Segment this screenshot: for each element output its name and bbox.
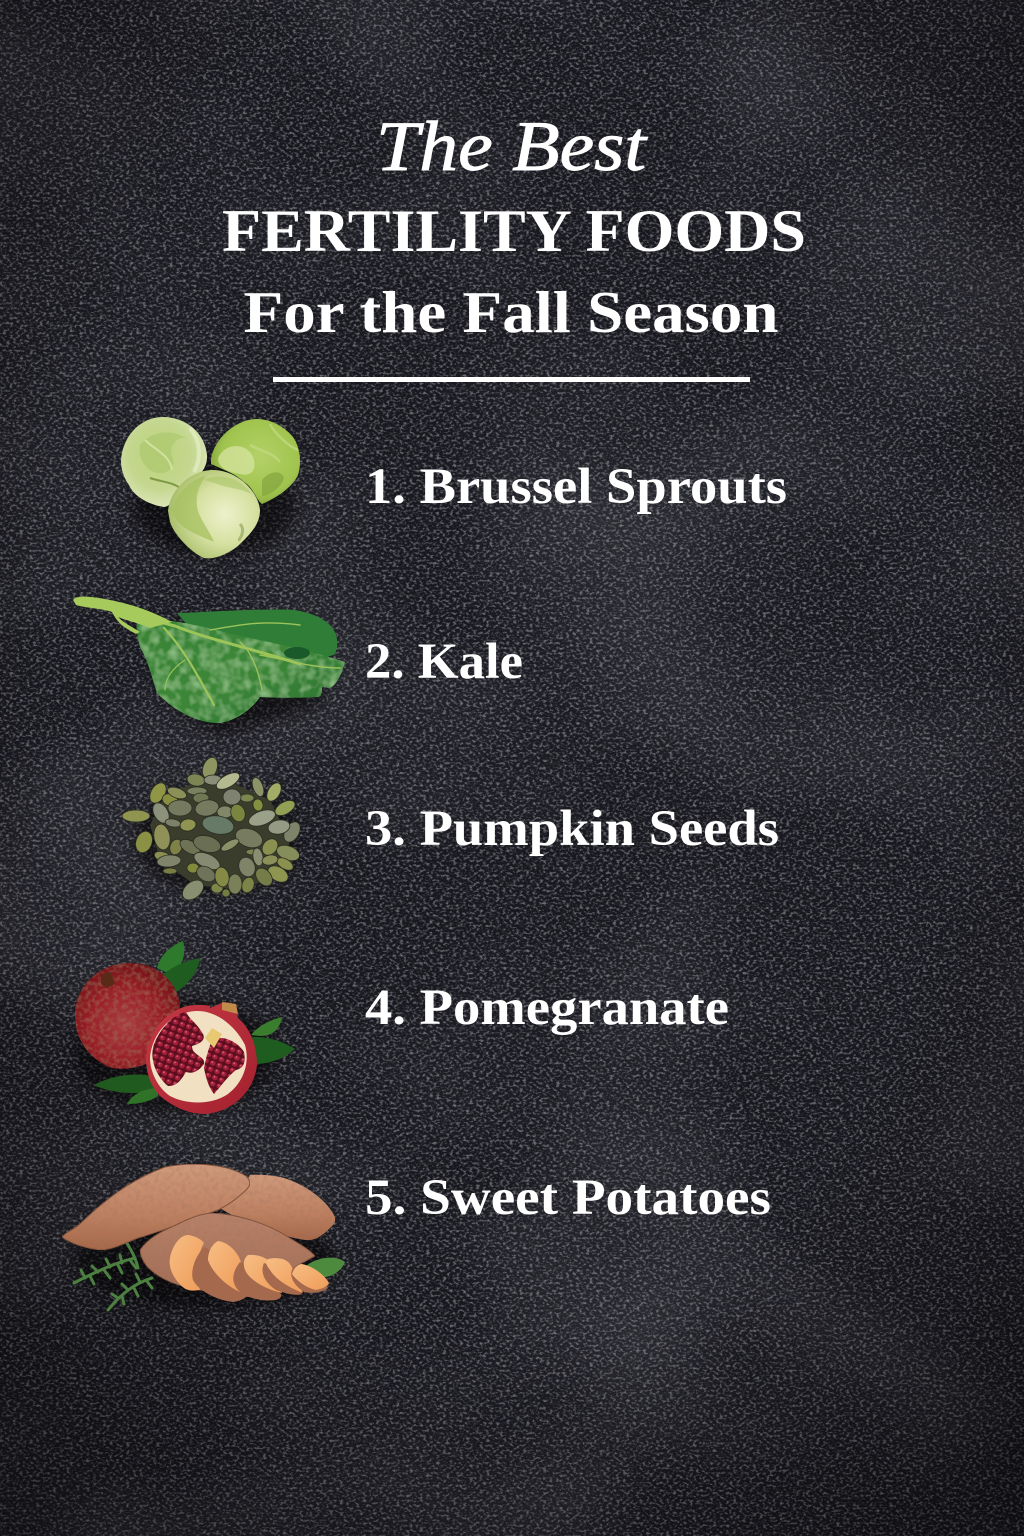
icon: pumpkin seeds pile [122,755,304,904]
label: 2. Kale [365,634,523,690]
list item 4: Pomegranate [75,941,729,1114]
title line: FERTILITY FOODS: FERTILITY FOODS [222,198,806,264]
list item 1: Brussel Sprouts [121,417,787,558]
rosemary [74,1235,152,1310]
sprout left [121,417,207,507]
list item 5: Sweet Potatoes [62,1164,771,1310]
icon: sweet potatoes [62,1164,345,1310]
cut fruit [146,1002,257,1114]
slice 5 [291,1264,329,1293]
potato slices [170,1235,329,1302]
icon: kale leaf [73,597,345,735]
crown [101,972,115,988]
label: 1. Brussel Sprouts [365,459,787,515]
icon: brussel sprouts [121,417,300,558]
sprout right [211,419,300,504]
arils [152,1012,245,1094]
slice 2 [192,1241,247,1302]
list item 3: Pumpkin Seeds [122,755,779,904]
leaves bottom [94,1074,158,1104]
leaf blade back [177,609,337,665]
front potato [140,1213,315,1297]
whole fruit [75,963,180,1069]
leaf hole [284,647,310,659]
sprout front [168,470,260,558]
icon: pomegranate [75,941,295,1114]
label: 5. Sweet Potatoes [365,1170,771,1226]
list item 2: Kale [73,597,523,735]
leaves right [251,1017,295,1064]
label: 3. Pumpkin Seeds [365,801,779,857]
leaf blade front [137,618,345,723]
top potato [62,1164,250,1250]
title line: For the Fall Season: For the Fall Season [244,279,778,345]
slice 3 [233,1255,282,1301]
leaves top [157,941,200,992]
label: 4. Pomegranate [365,980,729,1036]
slice 4 [262,1258,303,1295]
title divider [273,377,750,382]
rear potato [220,1175,335,1240]
stalk [73,597,172,634]
title [222,108,806,345]
basil leaf [306,1258,345,1277]
stem and veins [110,603,340,705]
slice 1 [170,1235,204,1291]
title line: The Best: The Best [376,108,648,186]
